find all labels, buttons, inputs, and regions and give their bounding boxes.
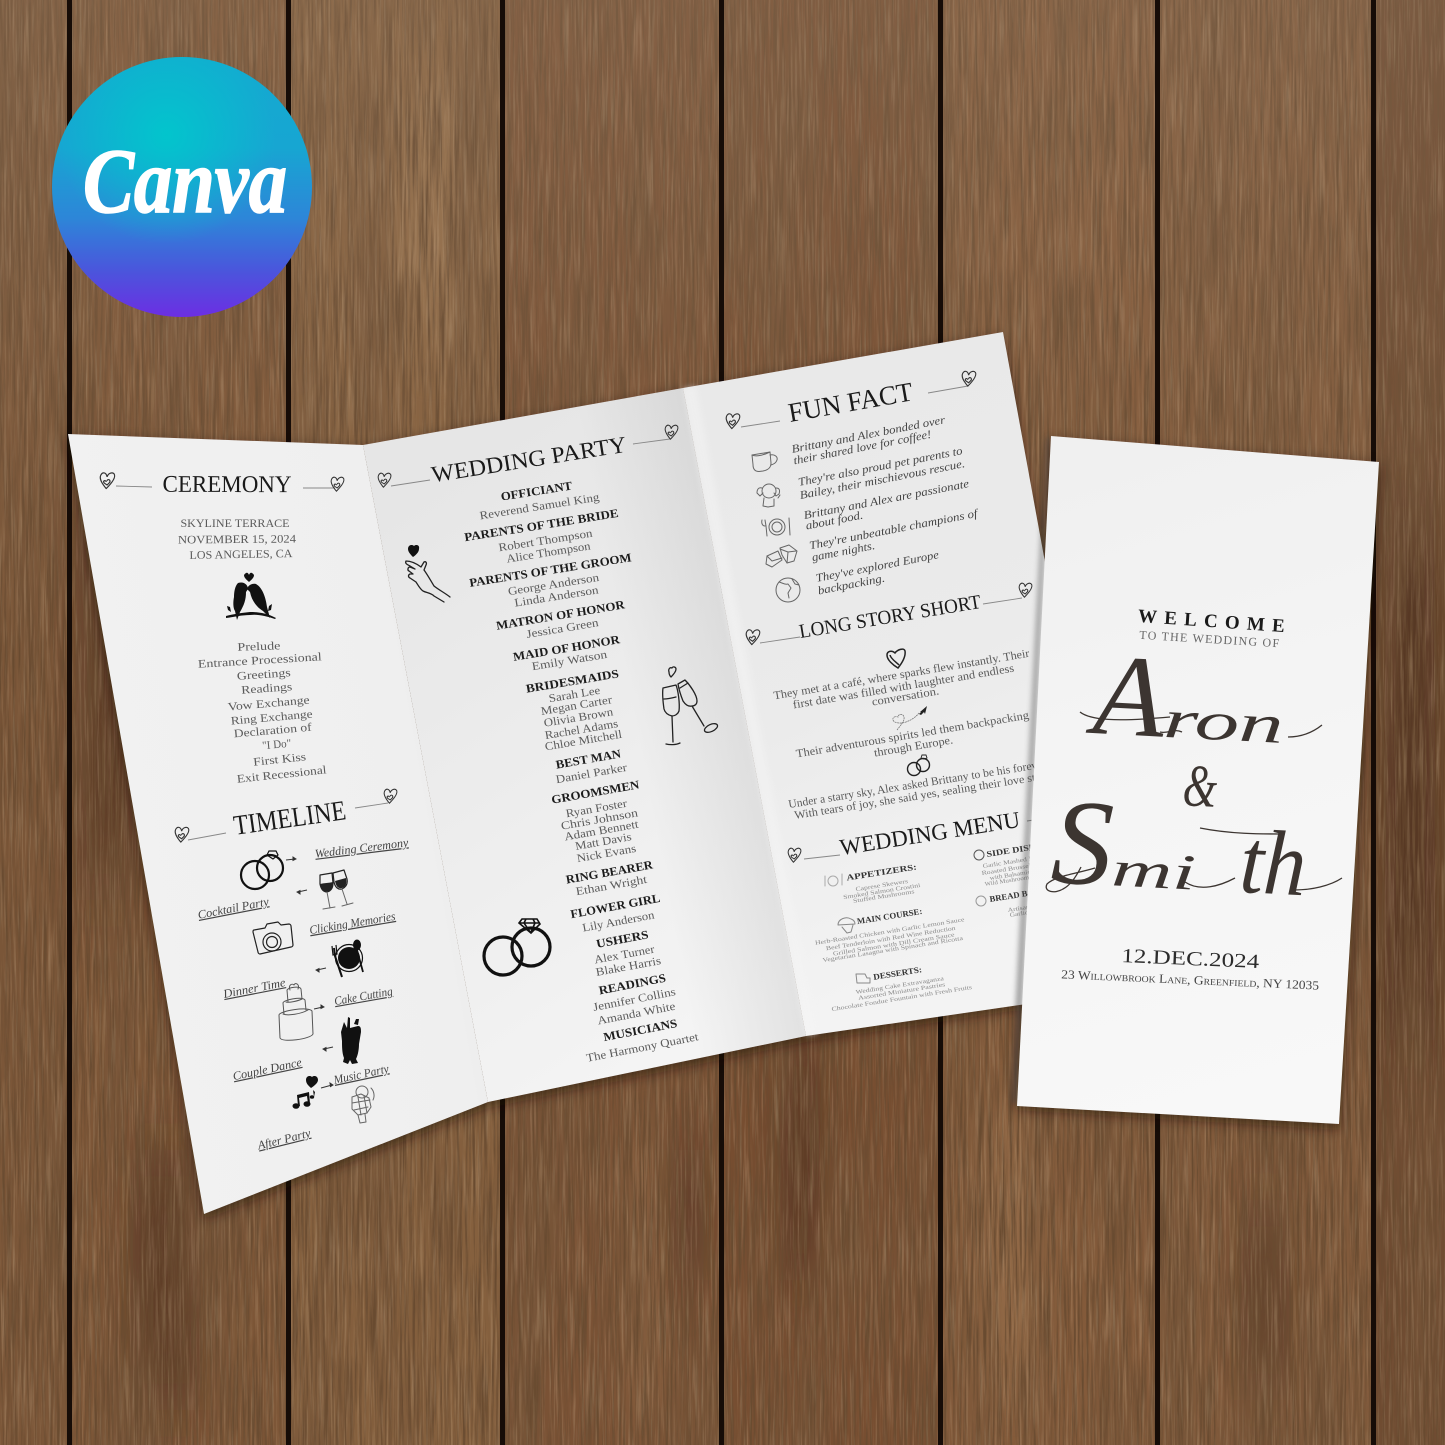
- wedding party names list: Amanda White: [597, 1001, 676, 1027]
- wedding party names list: Sarah Lee: [548, 685, 601, 705]
- panel: wedding party: [363, 388, 806, 1102]
- wedding party names list: MAID OF HONOR: [512, 632, 621, 664]
- menu: desserts: Chocolate Fondue Fountain with Fresh Fruits: [831, 985, 973, 1013]
- wedding party names list: Alex Turner: [593, 944, 656, 967]
- fun fact lines: backpacking.: [817, 573, 886, 597]
- icon: globe: [776, 578, 800, 602]
- fun fact lines: They're also proud pet parents to: [797, 445, 964, 489]
- story paragraph one: first date was filled with laughter and endless: [792, 663, 1016, 711]
- panel: fun fact, story and menu: [683, 332, 1123, 1036]
- timeline labels: Couple Dance: [231, 1055, 304, 1083]
- menu: main course: MAIN COURSE:: [856, 906, 923, 926]
- fun fact lines: their shared love for coffee!: [793, 429, 932, 467]
- icon: airplane heart trail: [893, 706, 927, 730]
- icon: dinner plate: [332, 940, 363, 977]
- ceremony order of service: Prelude: [237, 640, 281, 654]
- menu: side dishes: SIDE DISHES:: [986, 839, 1053, 859]
- wedding party names list: Ethan Wright: [575, 874, 649, 898]
- cover name: Aron: [1080, 631, 1322, 769]
- fun fact lines: Brittany and Alex bonded over: [791, 414, 947, 456]
- icon: dog: [757, 484, 780, 507]
- menu: appetizers: Stuffed Mushrooms: [853, 888, 916, 905]
- fold highlight: [683, 386, 818, 1036]
- wedding party names list: Alice Thompson: [506, 540, 592, 566]
- fun fact lines: They've explored Europe: [815, 549, 940, 585]
- long story short heading: [746, 583, 1032, 645]
- menu: bread basket: BREAD BASKET:: [989, 883, 1060, 904]
- icon: story rings: [908, 755, 930, 776]
- icon: champagne toast: [663, 667, 719, 745]
- icon: fun fact plate: [762, 518, 790, 536]
- ceremony venue text: [178, 518, 296, 562]
- timeline heading: [175, 789, 397, 842]
- menu: desserts: Assorted Miniature Pastries: [858, 982, 947, 1002]
- wedding party names list: OFFICIANT: [500, 479, 573, 504]
- story paragraph three: With tears of joy, she said yes, sealing their love story.: [794, 769, 1054, 822]
- cover ampersand: &: [1181, 752, 1219, 820]
- menu: bread basket: [976, 883, 1060, 919]
- wedding party names list: Blake Harris: [595, 955, 663, 979]
- menu: main course: Beef Tenderloin with Red Wine Reduction: [826, 925, 956, 952]
- ceremony order of service: First Kiss: [253, 751, 307, 769]
- timeline labels: Clicking Memories: [308, 909, 397, 937]
- menu: side dishes: with Balsamic Glaze: [989, 867, 1050, 882]
- menu: main course: Vegetarian Lasagna with Spinach and Ricotta: [822, 936, 964, 964]
- wedding menu heading: WEDDING MENU: [838, 807, 1022, 860]
- wedding party names list: MUSICIANS: [602, 1016, 679, 1044]
- menu: side dishes: Garlic Mashed Potatoes: [982, 853, 1055, 870]
- story paragraph one: They met at a café, where sparks flew instantly. Their: [773, 648, 1030, 702]
- wedding party names list: Jessica Green: [526, 617, 600, 641]
- wedding party names list: PARENTS OF THE BRIDE: [463, 506, 620, 544]
- story paragraph three: Under a starry sky, Alex asked Brittany to be his forever.: [788, 758, 1049, 811]
- menu: side dishes: Roasted Brussels Sprouts: [981, 859, 1060, 877]
- ceremony order of service: Vow Exchange: [227, 694, 310, 714]
- icon: story heart: [887, 649, 905, 668]
- ceremony order of service: Ring Exchange: [230, 708, 313, 728]
- wedding party names list: George Anderson: [507, 572, 600, 598]
- cover name: Aron: Aron: [1084, 631, 1288, 769]
- panel: front cover card: [1011, 436, 1379, 1124]
- icon: finger heart hand: [406, 545, 450, 602]
- ceremony venue text: SKYLINE TERRACE: [180, 518, 290, 530]
- menu: appetizers: Caprese Skewers: [855, 879, 909, 893]
- wedding party names list: Robert Thompson: [498, 528, 594, 554]
- wedding party names list: Chloe Mitchell: [544, 729, 623, 753]
- menu: desserts: [831, 964, 973, 1013]
- cover date: 12.DEC.2024: [1121, 945, 1260, 973]
- ceremony order of service: Declaration of: [233, 722, 312, 740]
- menu: desserts: DESSERTS:: [873, 964, 923, 982]
- wedding party heading: [378, 425, 678, 487]
- menu: main course: Grilled Salmon with Dill Cream Sauce: [833, 932, 955, 958]
- wedding party names list: Lily Anderson: [581, 909, 656, 935]
- menu: appetizers: Smoked Salmon Crostini: [843, 883, 921, 901]
- wedding party names list: FLOWER GIRL: [569, 891, 661, 921]
- cover welcome text: TO THE WEDDING OF: [1139, 628, 1280, 650]
- Canva logo badge: [52, 57, 312, 317]
- icon: love birds: [226, 573, 276, 620]
- panel: ceremony and timeline: [68, 434, 488, 1214]
- wedding party names list: BEST MAN: [555, 746, 622, 772]
- ceremony order of service: Greetings: [236, 667, 292, 683]
- wedding party heading: WEDDING PARTY: [430, 432, 628, 487]
- timeline labels: After Party: [255, 1126, 313, 1153]
- fun fact lines: [791, 414, 980, 597]
- icon: coffee cup: [752, 452, 777, 472]
- ceremony order of service: "I Do": [262, 738, 292, 752]
- icon: dice: [766, 545, 797, 567]
- timeline labels: Cocktail Party: [197, 894, 271, 922]
- ceremony heading: [100, 472, 344, 498]
- wedding party names list: MATRON OF HONOR: [495, 597, 626, 633]
- story paragraph one: conversation.: [871, 685, 940, 709]
- icon: after party lantern: [352, 1086, 374, 1123]
- icon: wine glasses: [320, 870, 353, 909]
- wedding party names list: [463, 479, 700, 1065]
- menu: appetizers: [825, 862, 921, 905]
- wedding party names list: Chris Johnson: [560, 807, 639, 833]
- fun fact lines: game nights.: [811, 540, 876, 564]
- menu: side dishes: [974, 839, 1060, 888]
- icon: large wedding rings: [484, 919, 550, 975]
- fun fact heading: FUN FACT: [786, 376, 916, 428]
- cover address: 23 Willowbrook Lane, Greenfield, NY 12035: [1061, 967, 1319, 993]
- ceremony heading: CEREMONY: [162, 472, 292, 498]
- wedding party names list: Nick Evans: [576, 843, 638, 865]
- timeline heading: TIMELINE: [232, 795, 348, 842]
- long story short heading: LONG STORY SHORT: [797, 591, 983, 643]
- wedding party names list: BRIDESMAIDS: [525, 666, 620, 696]
- menu: appetizers: APPETIZERS:: [846, 862, 918, 883]
- ceremony venue text: LOS ANGELES, CA: [189, 548, 293, 562]
- timeline labels: Music Party: [331, 1061, 391, 1087]
- wedding party names list: Jennifer Collins: [592, 986, 677, 1014]
- ceremony order of service: Readings: [241, 681, 293, 697]
- cover name: Smith: Smi th: [1049, 774, 1310, 922]
- wedding party names list: Daniel Parker: [555, 762, 628, 786]
- story paragraph two: through Europe.: [873, 734, 954, 760]
- wedding party names list: Olivia Brown: [543, 706, 614, 730]
- wedding party names list: Matt Davis: [574, 831, 633, 853]
- menu: main course: Herb-Roasted Chicken with Garlic Lemon Sauce: [815, 917, 965, 947]
- wedding party names list: RING BEARER: [565, 857, 654, 887]
- wedding party names list: PARENTS OF THE GROOM: [468, 550, 632, 590]
- menu: bread basket: Garlic Knots: [1009, 907, 1049, 919]
- wedding party names list: Rachel Adams: [544, 718, 620, 742]
- menu: side dishes: Wild Mushroom Risotto: [984, 872, 1051, 888]
- fun fact lines: Brittany and Alex are passionate: [803, 478, 970, 522]
- icon: dancing couple: [341, 1017, 361, 1064]
- icon: wedding cake: [279, 984, 313, 1040]
- ceremony order of service: [198, 640, 327, 786]
- fun fact lines: They're unbeatable champions of: [808, 507, 980, 552]
- menu: desserts: Wedding Cake Extravaganza: [855, 976, 945, 996]
- ceremony order of service: Exit Recessional: [236, 764, 327, 786]
- timeline labels: Dinner Time: [221, 975, 287, 1001]
- ceremony order of service: Entrance Processional: [198, 651, 322, 671]
- cover welcome text: WELCOME: [1137, 606, 1285, 637]
- icon: timeline rings: [241, 851, 283, 889]
- timeline labels: Cake Cutting: [333, 984, 394, 1008]
- timeline arrows: [286, 857, 333, 1088]
- ceremony venue text: NOVEMBER 15, 2024: [178, 533, 296, 547]
- fun fact lines: Bailey, their mischievous rescue.: [799, 458, 966, 502]
- timeline labels: [197, 835, 410, 1153]
- icon: camera: [253, 922, 293, 954]
- story paragraph two: Their adventurous spirits led them backpacking: [795, 710, 1030, 760]
- wedding party names list: READINGS: [598, 971, 667, 997]
- fun fact heading: [726, 371, 976, 429]
- wedding party names list: Linda Anderson: [514, 584, 600, 610]
- wedding party names list: Adam Bennett: [564, 818, 640, 843]
- menu: bread basket: Artisan Rolls: [1007, 902, 1049, 914]
- wedding party names list: The Harmony Quartet: [585, 1031, 700, 1065]
- timeline labels: Wedding Ceremony: [314, 835, 410, 861]
- wedding party names list: Emily Watson: [531, 649, 608, 673]
- wedding party names list: Megan Carter: [540, 694, 613, 718]
- fun fact lines: about food.: [805, 510, 864, 532]
- icon: music notes: [292, 1076, 318, 1109]
- menu: main course: [815, 906, 965, 964]
- wedding party names list: USHERS: [595, 927, 650, 951]
- wedding party names list: Reverend Samuel King: [479, 492, 600, 522]
- paper shadow: [66, 336, 1381, 1220]
- wedding party names list: GROOMSMEN: [550, 777, 641, 807]
- Canva logo badge: Canva: [83, 130, 287, 232]
- wedding party names list: Ryan Foster: [565, 798, 628, 820]
